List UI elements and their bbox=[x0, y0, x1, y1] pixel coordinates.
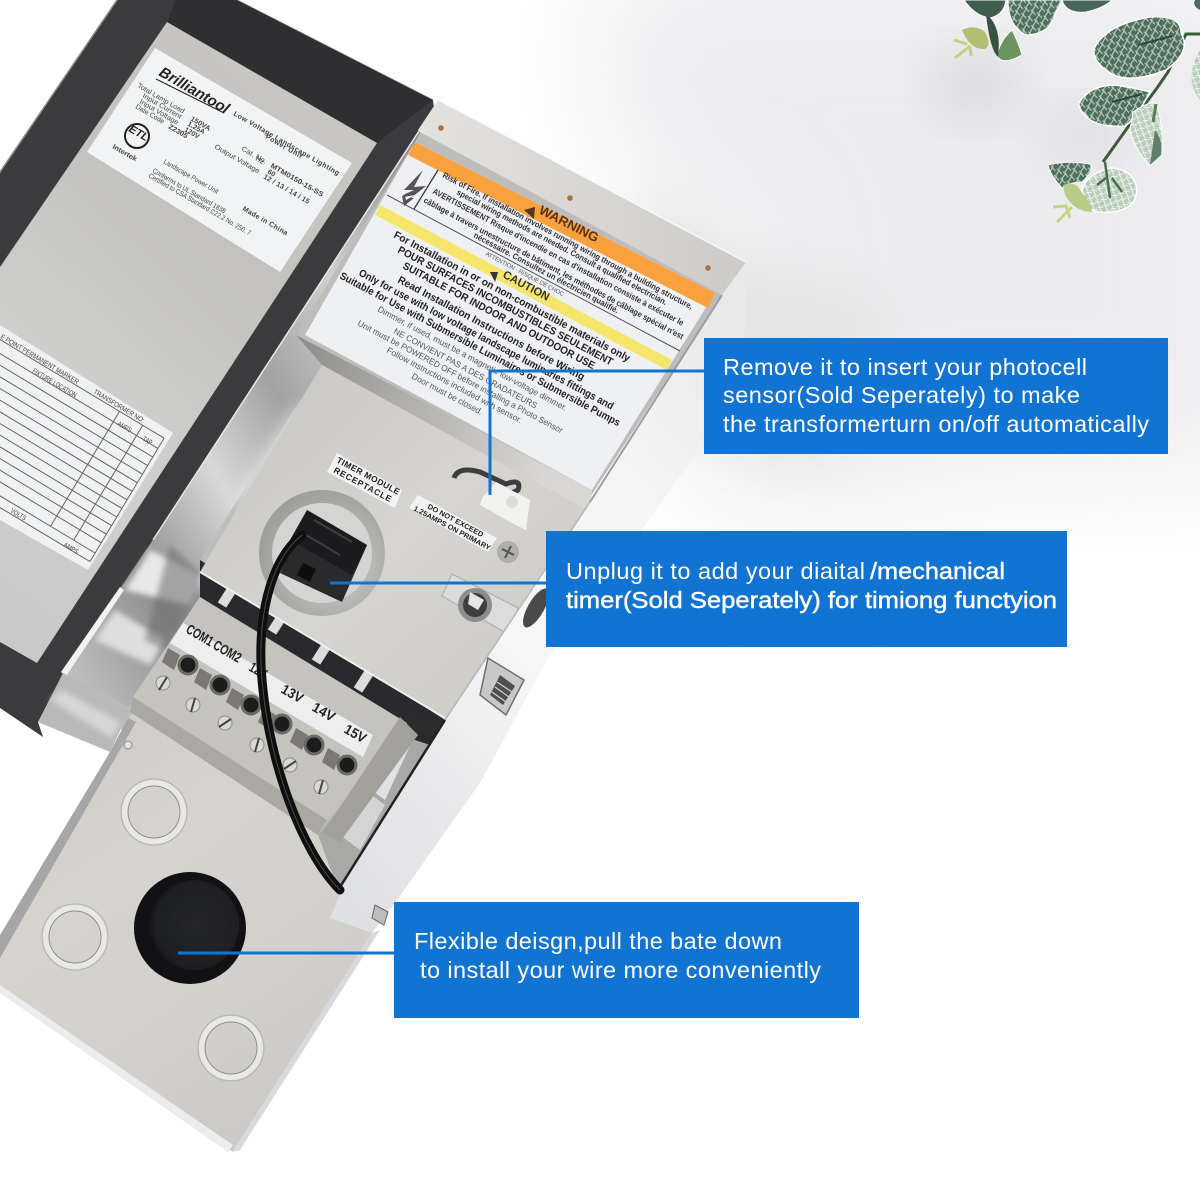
lip and warning label: NE CONVIENT PAS A DES GRADATEURS bbox=[392, 326, 539, 411]
rating label: Low Voltage Landscape Lighting bbox=[232, 111, 340, 177]
left inner wall bbox=[63, 108, 434, 707]
door frame bbox=[0, 0, 434, 737]
voltage strip: 15V bbox=[342, 721, 370, 746]
timer module tag: TIMER MODULE bbox=[335, 455, 402, 497]
lip and warning label: Follow instructions included with sensor. bbox=[385, 345, 524, 425]
yellow bar bbox=[375, 205, 672, 370]
lip and warning label: Door must be closed. bbox=[410, 371, 485, 417]
clamps between terminals bbox=[162, 648, 340, 770]
wiring chart label: E POINT PERMANENT MARKER bbox=[0, 334, 80, 386]
lip and warning label: POUR SURFACES INCOMBUSTIBLES SEULEMENT bbox=[396, 244, 615, 369]
lower side screw bbox=[372, 905, 388, 925]
callout: timer plug: Unplug it to add your diaital bbox=[566, 558, 865, 584]
wiring chart label: TRANSFORMER NO: bbox=[92, 389, 145, 425]
side grommet bbox=[518, 585, 554, 631]
voltage strip: 14V bbox=[310, 699, 339, 725]
top leaves cluster bbox=[954, 0, 1112, 61]
power cord bbox=[261, 535, 340, 890]
photocell plug bbox=[454, 470, 530, 530]
wiring chart label bbox=[0, 325, 173, 570]
rating label: 60 bbox=[266, 169, 276, 179]
lip and warning label: Suitable for Use with Submersible Luminaires or Submersible Pumps bbox=[338, 270, 622, 429]
lightning icon bbox=[402, 170, 426, 206]
lip and warning label: Risk of Fire. If installation involves running wiring through a building structure, bbox=[441, 170, 695, 311]
callout leader: cable cap bbox=[178, 952, 394, 954]
lip and warning label: Dimmer, if used, must be a magnetic low-voltage dimmer. bbox=[376, 304, 569, 413]
warning heading: WARNING bbox=[537, 202, 601, 245]
lip and warning label: For Installation in or on non-combustible materials only bbox=[392, 229, 632, 365]
wiring chart label: TAP bbox=[141, 436, 153, 447]
caution heading: CAUTION bbox=[501, 269, 551, 304]
voltage strip bbox=[170, 621, 373, 757]
callout: flexible design: Flexible deisgn,pull the bate down bbox=[414, 928, 782, 954]
do not exceed tag: 1.25AMPS ON PRIMARY bbox=[412, 504, 492, 552]
transformer: box interior bbox=[38, 108, 722, 895]
leaf: right edge bbox=[1192, 50, 1200, 100]
wiring chart label: AMPS bbox=[62, 542, 80, 556]
orange bar bbox=[408, 142, 715, 308]
upper wall beneath label bbox=[296, 335, 592, 512]
leaf: middle bbox=[1079, 85, 1150, 126]
rating label: Landscape Power Unit bbox=[162, 159, 219, 196]
voltage strip: COM2 bbox=[210, 637, 245, 666]
rating label: Z2305 bbox=[167, 124, 189, 140]
plant: eucalyptus branch bbox=[954, 0, 1200, 222]
rating label: Power Unit bbox=[264, 134, 304, 161]
slot screws bbox=[156, 676, 328, 794]
timer plate bbox=[200, 365, 590, 718]
recess behind terminal block bbox=[200, 560, 445, 745]
rating label: 120V bbox=[183, 127, 201, 141]
rating label: Total Lamp Load bbox=[136, 83, 185, 115]
rating label: Conforms to UL Standard 1838 bbox=[151, 168, 226, 215]
rating label: Hz bbox=[254, 156, 265, 166]
rating label: 150VA bbox=[189, 116, 212, 133]
lip and warning label bbox=[305, 100, 746, 490]
rating label bbox=[87, 48, 352, 272]
black cap bbox=[134, 872, 246, 984]
lip and warning label: special wiring methods are needed. Consult a qualified electrician. bbox=[455, 187, 669, 307]
recess ring bbox=[259, 490, 385, 616]
lid hinge screw bbox=[124, 741, 132, 749]
warning label body bbox=[305, 142, 715, 490]
terminal block bbox=[130, 597, 418, 842]
rating label: Made in China bbox=[241, 206, 289, 237]
wire terminals bbox=[179, 656, 356, 774]
door edge strip bbox=[61, 587, 124, 676]
rating label: MTM0150-15-SS bbox=[269, 163, 325, 199]
rating label: Brilliantool bbox=[156, 64, 233, 118]
rating label: Date Code bbox=[134, 104, 165, 126]
callout: timer plug: timer(Sold Seperately) for timiong functyion bbox=[566, 587, 1057, 613]
callout: photocell sensor: the transformerturn on/off automatically bbox=[723, 411, 1149, 437]
lip and warning label: nécessaire. Consultez un électricien qualifié. bbox=[472, 230, 621, 315]
bottom access lid bbox=[0, 712, 380, 1152]
wiring chart label: VOLTS bbox=[9, 508, 27, 523]
sensor socket plate bbox=[442, 574, 518, 634]
lip and warning label: Read Installation Instructions before Wiring bbox=[396, 274, 587, 383]
rating label: Certified to CSA Standard C22.2 No. 250. 7 bbox=[147, 173, 252, 237]
rating label: Cat. No. bbox=[240, 146, 268, 166]
latch bbox=[480, 658, 524, 715]
voltage strip: 12V bbox=[246, 659, 270, 682]
voltage strip: COM1 bbox=[184, 621, 217, 649]
lip and warning label: AVERTISSEMENT Risque d'incendie en cas d'installation consiste à exécuter le bbox=[431, 186, 686, 328]
right side wall bbox=[325, 262, 746, 933]
transformer: open door bbox=[0, 0, 434, 737]
rating label: Intertek bbox=[111, 144, 138, 163]
callout: timer plug: /mechanical bbox=[870, 558, 1005, 584]
leaf: lower round bbox=[1082, 168, 1137, 213]
rating label: Output Voltage bbox=[213, 144, 261, 175]
lip and warning label: ATTENTION - RISQUE DE CHOC bbox=[484, 251, 565, 298]
rating label: 12 / 13 / 14 / 15 bbox=[262, 174, 311, 206]
callout: flexible design bbox=[394, 902, 859, 1018]
rating label: Input Voltage bbox=[138, 99, 180, 127]
timer module tag bbox=[327, 453, 402, 508]
lip and warning label: SUITABLE FOR INDOOR AND OUTDOOR USE bbox=[401, 260, 597, 372]
leaf: pale hanging bbox=[1130, 103, 1163, 166]
wiring chart label: FIXTURE LOCATION bbox=[31, 368, 77, 399]
knockout rings bbox=[42, 779, 264, 1081]
door hinge flange bbox=[38, 673, 130, 752]
leaf: lower left bbox=[1048, 162, 1091, 188]
ETL mark: ETL bbox=[126, 123, 151, 144]
inner end of the box bbox=[318, 720, 445, 895]
rating label: 1.25A bbox=[186, 121, 206, 136]
rating label: Input Current bbox=[141, 93, 183, 121]
timer module tag: RECEPTACLE bbox=[332, 465, 394, 504]
callout: photocell sensor: sensor(Sold Seperately) to make bbox=[723, 382, 1080, 408]
leaf: large top bbox=[1094, 17, 1184, 78]
plug in timer receptacle bbox=[280, 510, 367, 602]
lip and warning label: Only for use with low voltage landscape luminaries fittings and bbox=[357, 267, 616, 412]
phillips screw bbox=[497, 541, 519, 563]
stem bbox=[1103, 34, 1200, 162]
voltage strip: 13V bbox=[278, 681, 307, 706]
callout leader: timer bbox=[330, 582, 546, 584]
wiring chart label: AMPS bbox=[116, 421, 133, 435]
callout: timer plug bbox=[546, 531, 1067, 647]
lip and warning label: câblage à travers unestructure de bâtiment, les méthodes de câblage spécial n'est bbox=[422, 195, 686, 341]
do not exceed tag: DO NOT EXCEED bbox=[426, 502, 485, 539]
callout: flexible design: to install your wire more conveniently bbox=[420, 957, 821, 983]
lip and warning label: Unit must be POWERED OFF before installing a Photo Sensor bbox=[356, 318, 565, 435]
callout: photocell sensor bbox=[704, 338, 1168, 454]
callout: photocell sensor: Remove it to insert your photocell bbox=[723, 354, 1087, 380]
callout leader: photocell bbox=[490, 371, 704, 495]
door inner panel bbox=[0, 22, 377, 663]
wall highlights bbox=[125, 550, 205, 605]
